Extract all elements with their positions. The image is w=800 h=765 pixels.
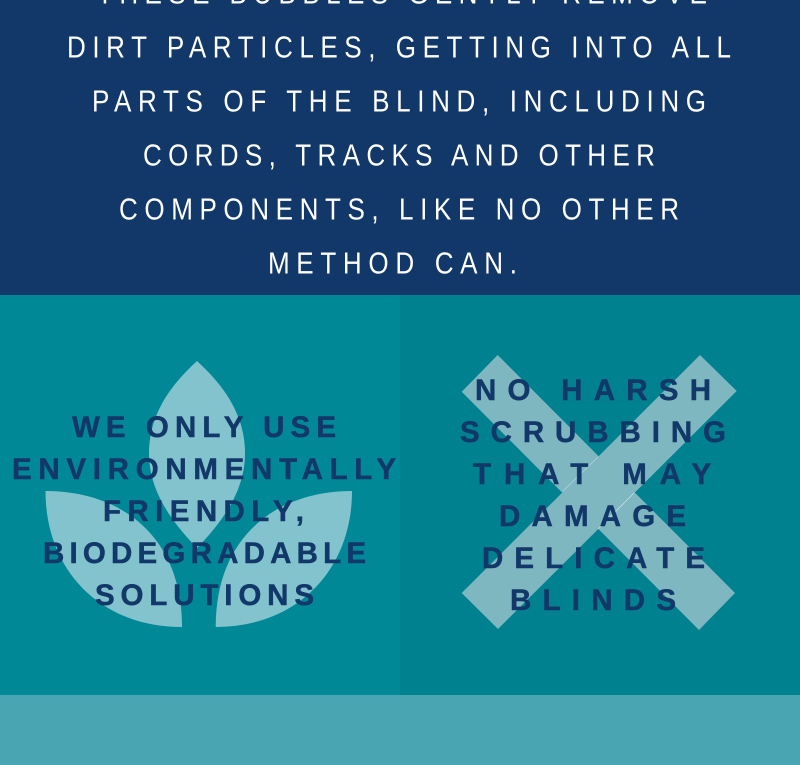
text block: bubbles description: CORDS, TRACKS AND OTHER: [143, 138, 655, 173]
text block: bubbles description: COMPONENTS, LIKE NO OTHER: [119, 192, 679, 227]
text block: no harsh scrubbing warning: NO HARSH: [475, 374, 711, 407]
text block: bubbles description: METHOD CAN.: [268, 246, 517, 281]
text block: environmentally friendly solutions: SOLUTIONS: [95, 579, 314, 612]
icon: cross mark: [462, 355, 737, 630]
text block: no harsh scrubbing warning: SCRUBBING: [460, 416, 726, 449]
text block: bubbles description: DIRT PARTICLES, GETTING INTO ALL: [67, 30, 731, 65]
panel: intro description: [0, 0, 800, 295]
text block: no harsh scrubbing warning: DELICATE: [482, 542, 705, 575]
text block: environmentally friendly solutions: [12, 411, 396, 612]
text block: no harsh scrubbing warning: BLINDS: [510, 584, 676, 617]
text block: bubbles description: PARTS OF THE BLIND, INCLUDING: [92, 84, 706, 119]
text block: bubbles description: [67, 0, 731, 281]
panel: no harsh scrubbing: [400, 295, 800, 695]
footer band: [0, 695, 800, 765]
text block: no harsh scrubbing warning: THAT MAY: [473, 458, 711, 491]
text block: environmentally friendly solutions: WE ONLY USE: [72, 411, 336, 444]
text block: no harsh scrubbing warning: DAMAGE: [499, 500, 686, 533]
text block: environmentally friendly solutions: BIODEGRADABLE: [43, 537, 366, 570]
icon: three-leaf plant: [46, 361, 352, 627]
text block: environmentally friendly solutions: ENVIRONMENTALLY: [12, 453, 396, 486]
panel: environmentally friendly: [0, 295, 400, 695]
text block: no harsh scrubbing warning: [460, 374, 726, 617]
text block: environmentally friendly solutions: FRIENDLY,: [103, 495, 304, 528]
